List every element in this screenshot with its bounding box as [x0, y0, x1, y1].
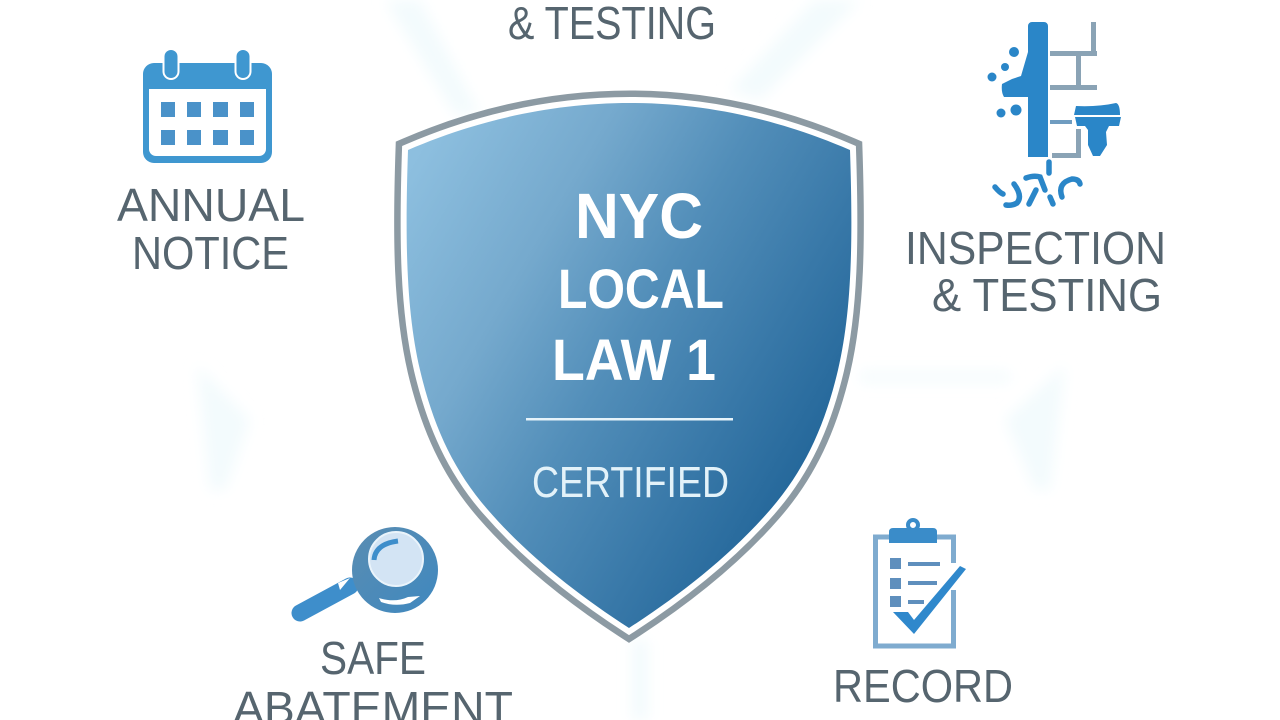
label: inspection and testing: INSPECTION [905, 222, 1166, 274]
label: annual notice: ANNUAL [117, 179, 305, 231]
shield subtitle: certified: CERTIFIED [532, 458, 729, 507]
shield title: NYC: NYC [575, 180, 703, 252]
label: inspection and testing [905, 222, 1166, 321]
label: annual notice: NOTICE [132, 227, 289, 279]
label: inspection and testing: & TESTING [932, 269, 1162, 321]
label: safe abatement: SAFE [320, 632, 426, 684]
label: record: RECORD [833, 660, 1013, 712]
shield badge [407, 103, 851, 628]
icon: clipboard with check [876, 520, 966, 646]
shield title: local: LOCAL [558, 257, 724, 320]
icon: calendar [143, 49, 272, 163]
label: annual notice [117, 179, 305, 279]
label: safe abatement [233, 632, 513, 720]
background: faint rays [197, 0, 1065, 720]
icon: magnifying glass [300, 527, 438, 613]
shield title: law 1: LAW 1 [552, 328, 716, 393]
icon: wall and brush [988, 22, 1121, 205]
